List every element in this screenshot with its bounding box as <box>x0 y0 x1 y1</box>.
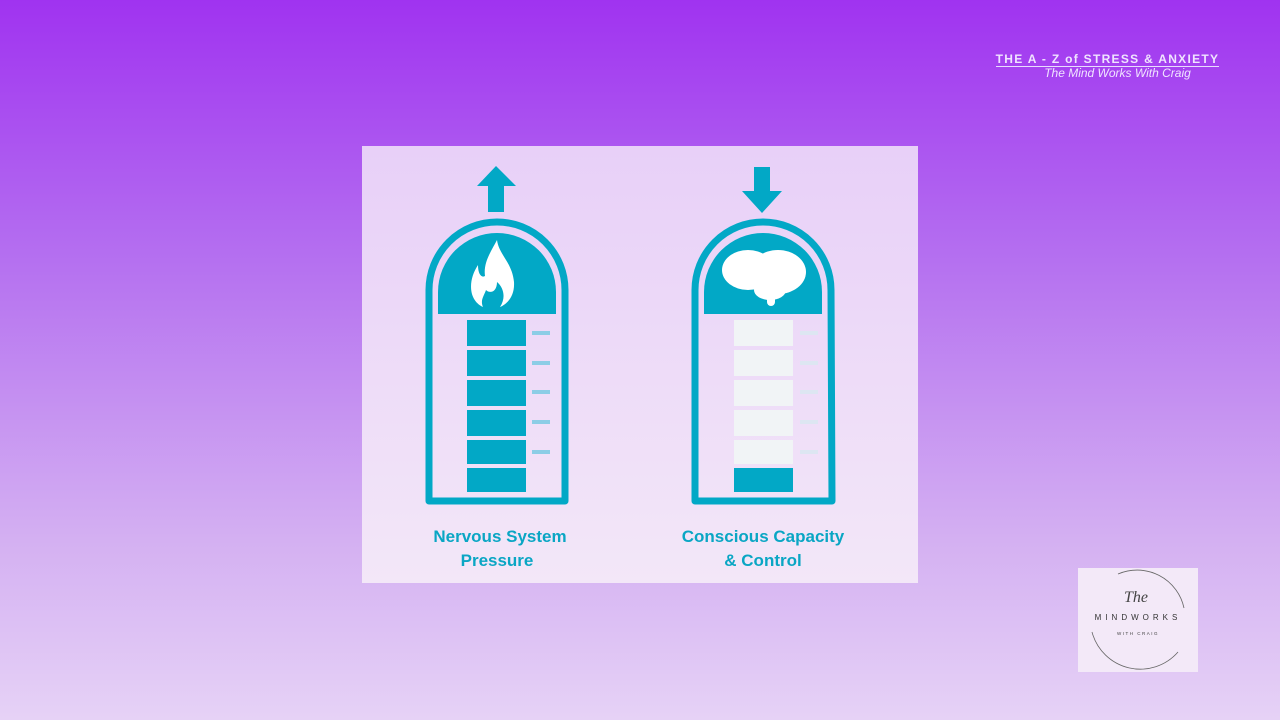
header title <box>996 52 1219 80</box>
header title: The Mind Works With Craig <box>1044 66 1191 80</box>
gauge: nervous system pressure <box>429 222 565 501</box>
logo: the mindworks with craig: MINDWORKS <box>1095 613 1181 622</box>
arrow up <box>477 166 516 212</box>
main panel: gauges <box>362 146 918 583</box>
logo: the mindworks with craig <box>1078 568 1198 672</box>
arrow down <box>742 167 782 213</box>
icon: flame <box>471 240 514 307</box>
header title: THE A - Z of STRESS & ANXIETY <box>996 52 1219 66</box>
logo: the mindworks with craig: The <box>1124 589 1148 606</box>
gauge: conscious capacity <box>695 222 832 501</box>
main panel: gauges: & Control <box>724 551 802 570</box>
logo: the mindworks with craig: WITH CRAIG <box>1117 631 1159 636</box>
label: nervous system pressure: Nervous System <box>433 527 567 546</box>
main panel: gauges: Pressure <box>461 551 533 570</box>
label: conscious capacity & control: Conscious Capacity <box>682 527 845 546</box>
icon: brain <box>722 250 806 306</box>
